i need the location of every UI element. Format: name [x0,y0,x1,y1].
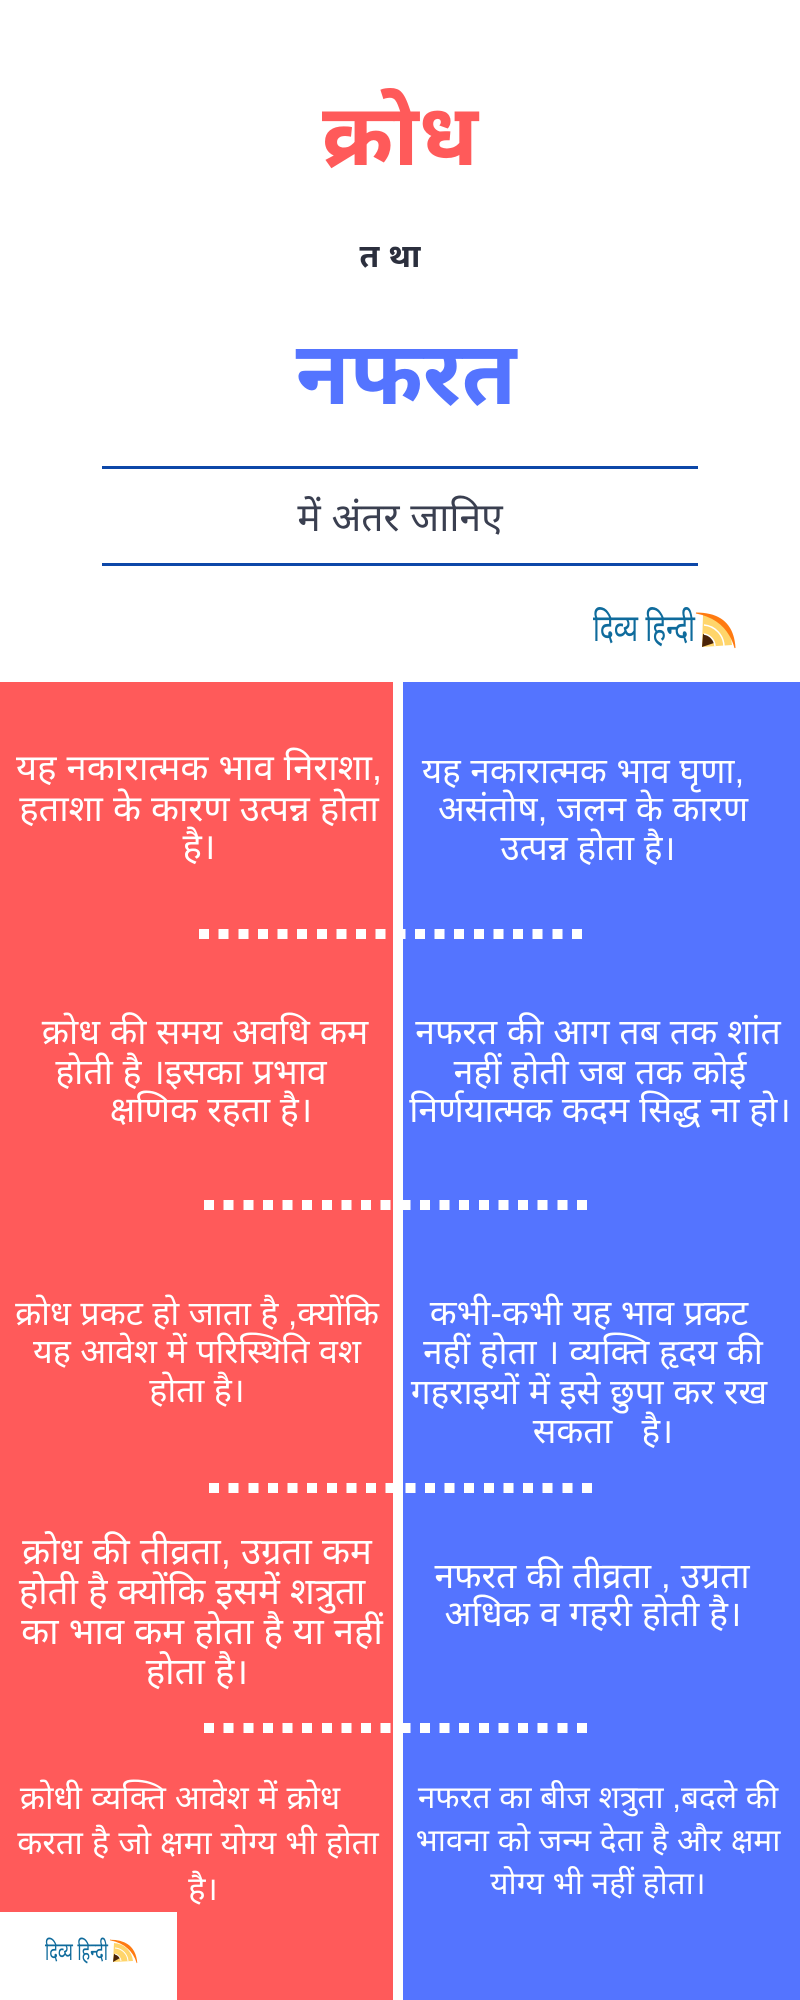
text: krodh row 2: क्षणिक रहता है। [110,1090,312,1130]
text: krodh row 4: होता है। [146,1651,248,1692]
text: krodh row 2: क्रोध की समय अवधि कम [42,1012,368,1052]
text: nafrat row 3: सकता है। [533,1412,673,1451]
text: nafrat row 1: असंतोष, जलन के कारण [438,790,748,829]
text: krodh row 2 [42,1012,369,1130]
text: krodh row 3: क्रोध प्रकट हो जाता है ,क्योंकि [15,1295,379,1333]
title: krodh: क्रोध [322,88,478,184]
text: nafrat row 2: नफरत की आग तब तक शांत [415,1012,781,1052]
text: krodh row 3 [15,1294,380,1410]
text: krodh row 4: होती है क्योंकि इसमें शत्रुता [19,1571,365,1612]
text: krodh row 3: होता है। [149,1372,245,1410]
footer logo panel [0,1912,177,2000]
text: nafrat row 4: नफरत की तीव्रता , उग्रता [434,1556,750,1596]
text: krodh row 1: है। [182,826,216,867]
logo: footer: दिव्य हिन्दी [45,1937,108,1966]
title: nafrat: नफरत [296,324,516,423]
text: krodh row 5: क्रोधी व्यक्ति आवेश में क्रोध [20,1779,340,1816]
text: nafrat row 3: कभी-कभी यह भाव प्रकट [430,1294,748,1333]
text: krodh row 1: हताशा के कारण उत्पन्न होता [19,788,379,829]
text: nafrat row 4 [434,1556,750,1634]
text: nafrat row 4: अधिक व गहरी होती है। [445,1594,741,1634]
logo: top: दिव्य हिन्दी [593,606,696,650]
text: nafrat row 5 [416,1779,781,1901]
text: nafrat row 2: निर्णयात्मक कदम सिद्ध ना हो। [409,1090,791,1130]
separator 4 [204,1723,588,1733]
text: nafrat row 5: नफरत का बीज शत्रुता ,बदले की [418,1779,778,1815]
text: nafrat row 1: उत्पन्न होता है। [500,829,676,868]
subtitle rule top [102,466,698,469]
separator 3 [209,1483,593,1493]
text: nafrat row 3: गहराइयों में इसे छुपा कर रख [411,1373,767,1412]
separator 2 [204,1200,588,1210]
panel: krodh column [0,682,393,2000]
subtitle: में अंतर जानिए [297,497,503,540]
text: krodh row 4 [18,1531,384,1692]
text: krodh row 5 [17,1779,380,1907]
subtitle rule bottom [102,563,698,566]
text: nafrat row 2: नहीं होती जब तक कोई [454,1052,746,1092]
text: krodh row 5: है। [188,1870,218,1907]
text: nafrat row 1 [422,752,749,868]
text: nafrat row 1: यह नकारात्मक भाव घृणा, [422,752,744,791]
text: krodh row 2: होती है ।इसका प्रभाव [55,1052,327,1092]
separator 1 [199,929,583,939]
text: krodh row 1 [16,747,382,867]
text: krodh row 3: यह आवेश में परिस्थिति वश [33,1333,361,1371]
text: nafrat row 3 [410,1294,768,1451]
text: nafrat row 5: योग्य भी नहीं होता। [490,1865,706,1901]
text: nafrat row 2 [409,1012,791,1130]
heading: tatha: त था [360,238,420,274]
text: krodh row 4: का भाव कम होता है या नहीं [21,1611,383,1652]
text: krodh row 5: करता है जो क्षमा योग्य भी होता [17,1824,379,1861]
text: krodh row 1: यह नकारात्मक भाव निराशा, [16,747,382,788]
panel: nafrat column [403,682,800,2000]
text: nafrat row 3: नहीं होता । व्यक्ति हृदय की [423,1333,763,1372]
text: krodh row 4: क्रोध की तीव्रता, उग्रता कम [22,1531,372,1572]
text: nafrat row 5: भावना को जन्म देता है और क्षमा [416,1822,780,1858]
